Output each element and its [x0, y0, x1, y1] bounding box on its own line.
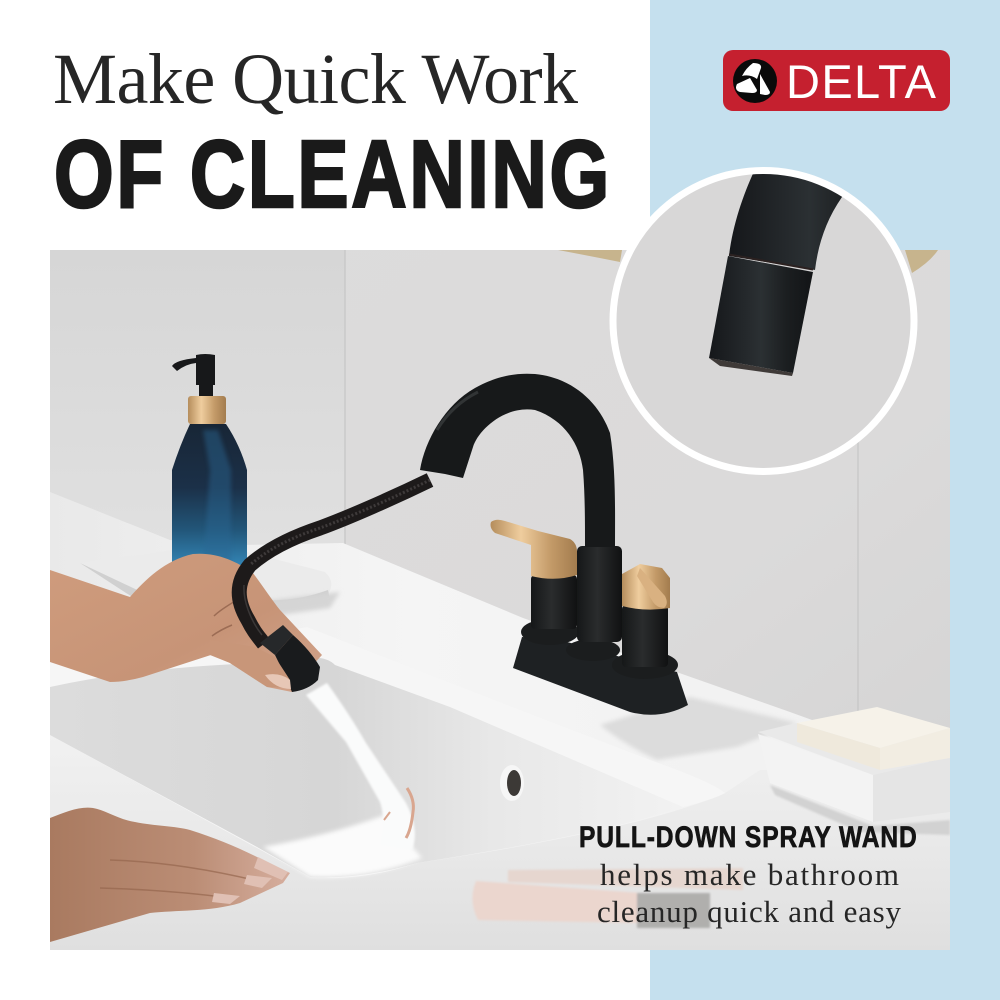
hose [239, 480, 430, 644]
left handle body [531, 575, 577, 629]
basin interior [50, 658, 606, 878]
blue side panel [650, 0, 1000, 1000]
left base [521, 622, 577, 642]
finger nails [254, 857, 288, 880]
spout tube [729, 160, 890, 270]
caption line two: cleanup quick and easy [597, 894, 902, 929]
right handle body [622, 605, 668, 667]
soap [797, 707, 950, 770]
pump [172, 354, 215, 397]
center base [572, 640, 620, 656]
front counter [50, 820, 950, 950]
pink items [472, 868, 743, 928]
thumb [210, 648, 291, 689]
callout: spray head close-up [610, 160, 920, 480]
drain [500, 765, 524, 801]
icon: Delta triangle mark [733, 59, 777, 103]
spout arch [420, 374, 615, 547]
dish rim [759, 726, 930, 762]
sprayer head [260, 625, 320, 692]
wall [346, 250, 950, 728]
soap dish [758, 707, 950, 835]
nozzle [709, 358, 793, 376]
left hand [50, 554, 322, 692]
faucet shadow [600, 697, 797, 760]
caption [579, 820, 917, 929]
lip [50, 659, 286, 864]
title line one: Make Quick Work [53, 39, 578, 119]
basin floor [263, 815, 422, 877]
dish left face [758, 734, 873, 822]
logo: Delta [723, 50, 950, 111]
panel: bathroom photo [50, 250, 950, 950]
soap tray [81, 564, 339, 616]
title [53, 39, 609, 228]
water stream [306, 683, 415, 850]
left gold handle [490, 520, 577, 579]
dish shadow [770, 785, 950, 835]
caption heading: PULL-DOWN SPRAY WAND [579, 820, 917, 854]
deck plate [513, 637, 688, 715]
thumb nail [265, 674, 291, 689]
logo wordmark: DELTA [786, 55, 937, 108]
gold mirror edges [558, 250, 622, 262]
sink basin [50, 658, 561, 878]
soap bottle [172, 354, 247, 565]
right base [619, 655, 678, 672]
title line two: OF CLEANING [54, 121, 609, 228]
dish right face [873, 758, 950, 788]
gold collar [188, 396, 226, 424]
bottle body [172, 424, 247, 565]
spray head body [709, 256, 813, 373]
lower hand [50, 808, 290, 942]
center column [577, 546, 622, 642]
faucet [420, 374, 688, 715]
right gold handle [622, 564, 670, 610]
caption line one: helps make bathroom [600, 857, 899, 892]
countertop [50, 492, 859, 878]
